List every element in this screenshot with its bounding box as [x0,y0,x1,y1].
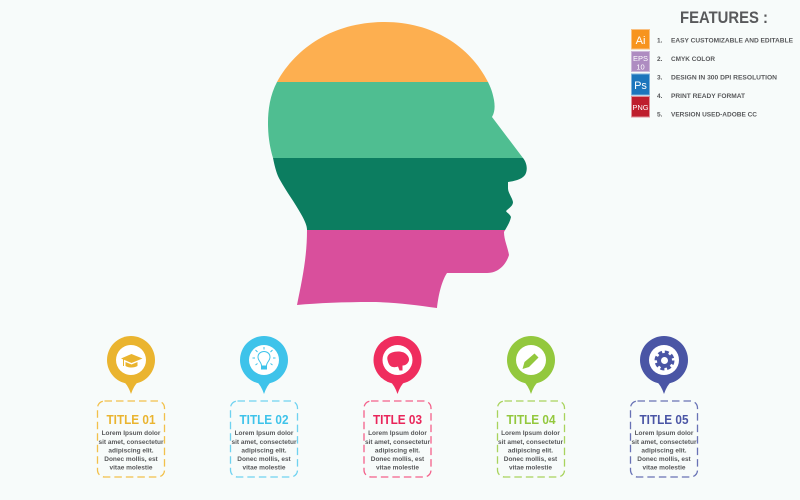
text 05: vitae molestie [642,464,686,472]
text 05: Lorem Ipsum dolor [635,430,694,437]
icon: pencil [522,354,538,369]
text 02: Donec mollis, est [237,456,292,463]
item 05 [630,336,698,477]
text 04: sit amet, consectetur [498,439,563,446]
text 02: Lorem Ipsum dolor [235,430,294,437]
pin 04 [507,336,555,394]
icon: EPS [632,52,650,72]
head band: orange [277,22,488,82]
text 03: sit amet, consectetur [365,439,430,446]
head band: dark green [260,158,540,230]
text 05: adipiscing elit. [641,448,687,454]
text 03: Lorem Ipsum dolor [368,430,427,437]
text 04: adipiscing elit. [508,448,553,454]
text 02: adipiscing elit. [241,448,287,454]
box 04 [498,401,564,477]
head band: pink [297,230,509,308]
title 02: TITLE 02 [240,412,288,427]
box 01 [98,401,164,477]
pin 02 [240,336,288,394]
title 03: TITLE 03 [373,412,422,427]
text 05: Donec mollis, est [637,456,692,463]
pin 01 [107,336,155,394]
icon: PNG: PNG [632,103,649,112]
features list: 5. [657,112,663,118]
icon: EPS: 10 [636,62,645,72]
text 01: vitae molestie [110,464,153,472]
icon: Ps [632,74,650,95]
features list: CMYK COLOR [671,56,715,63]
features list: 2. [657,56,663,63]
text 05: sit amet, consectetur [631,439,697,446]
box 02 [230,401,298,477]
text 04: vitae molestie [509,464,552,472]
title 04: TITLE 04 [506,412,556,427]
text 04: Donec mollis, est [504,456,558,463]
icon: brain [387,352,409,370]
features heading: FEATURES : [680,8,768,27]
icon: gear [656,352,673,369]
title 01: TITLE 01 [106,412,156,427]
box 05 [630,401,698,477]
features list: VERSION USED-ADOBE CC [671,112,757,118]
features list: PRINT READY FORMAT [671,93,745,100]
item 04 [498,336,564,477]
text 01: sit amet, consectetur [98,439,164,446]
icon: EPS: EPS [633,54,648,63]
features list: DESIGN IN 300 DPI RESOLUTION [671,74,777,82]
text 01: Donec mollis, est [104,456,159,463]
item 01 [98,336,164,477]
text 02: vitae molestie [242,464,286,472]
item 03 [364,336,431,477]
features list: 3. [657,74,663,82]
box 03 [364,401,431,477]
icon: light bulb [252,347,276,369]
head silhouette [268,22,527,308]
features list [657,38,794,118]
pin 03 [374,336,422,394]
text 01: Lorem Ipsum dolor [102,430,161,437]
pin 05 [640,336,688,394]
features list: EASY CUSTOMIZABLE AND EDITABLE [671,38,794,44]
text 03: adipiscing elit. [375,448,420,454]
icon: Ai: Ai [636,35,645,47]
icon: Ai [632,30,650,49]
features list: 4. [657,93,663,100]
text 01: adipiscing elit. [108,448,154,454]
features list: 1. [657,38,663,44]
icon: graduation cap [121,354,142,368]
text 02: sit amet, consectetur [231,439,297,446]
icon: Ps: Ps [634,80,647,92]
title 05: TITLE 05 [640,412,688,427]
item 02 [230,336,298,477]
text 04: Lorem Ipsum dolor [501,430,560,437]
icon: PNG [632,96,650,117]
head band: light green [260,82,540,158]
text 03: Donec mollis, est [371,456,425,463]
text 03: vitae molestie [376,464,419,472]
